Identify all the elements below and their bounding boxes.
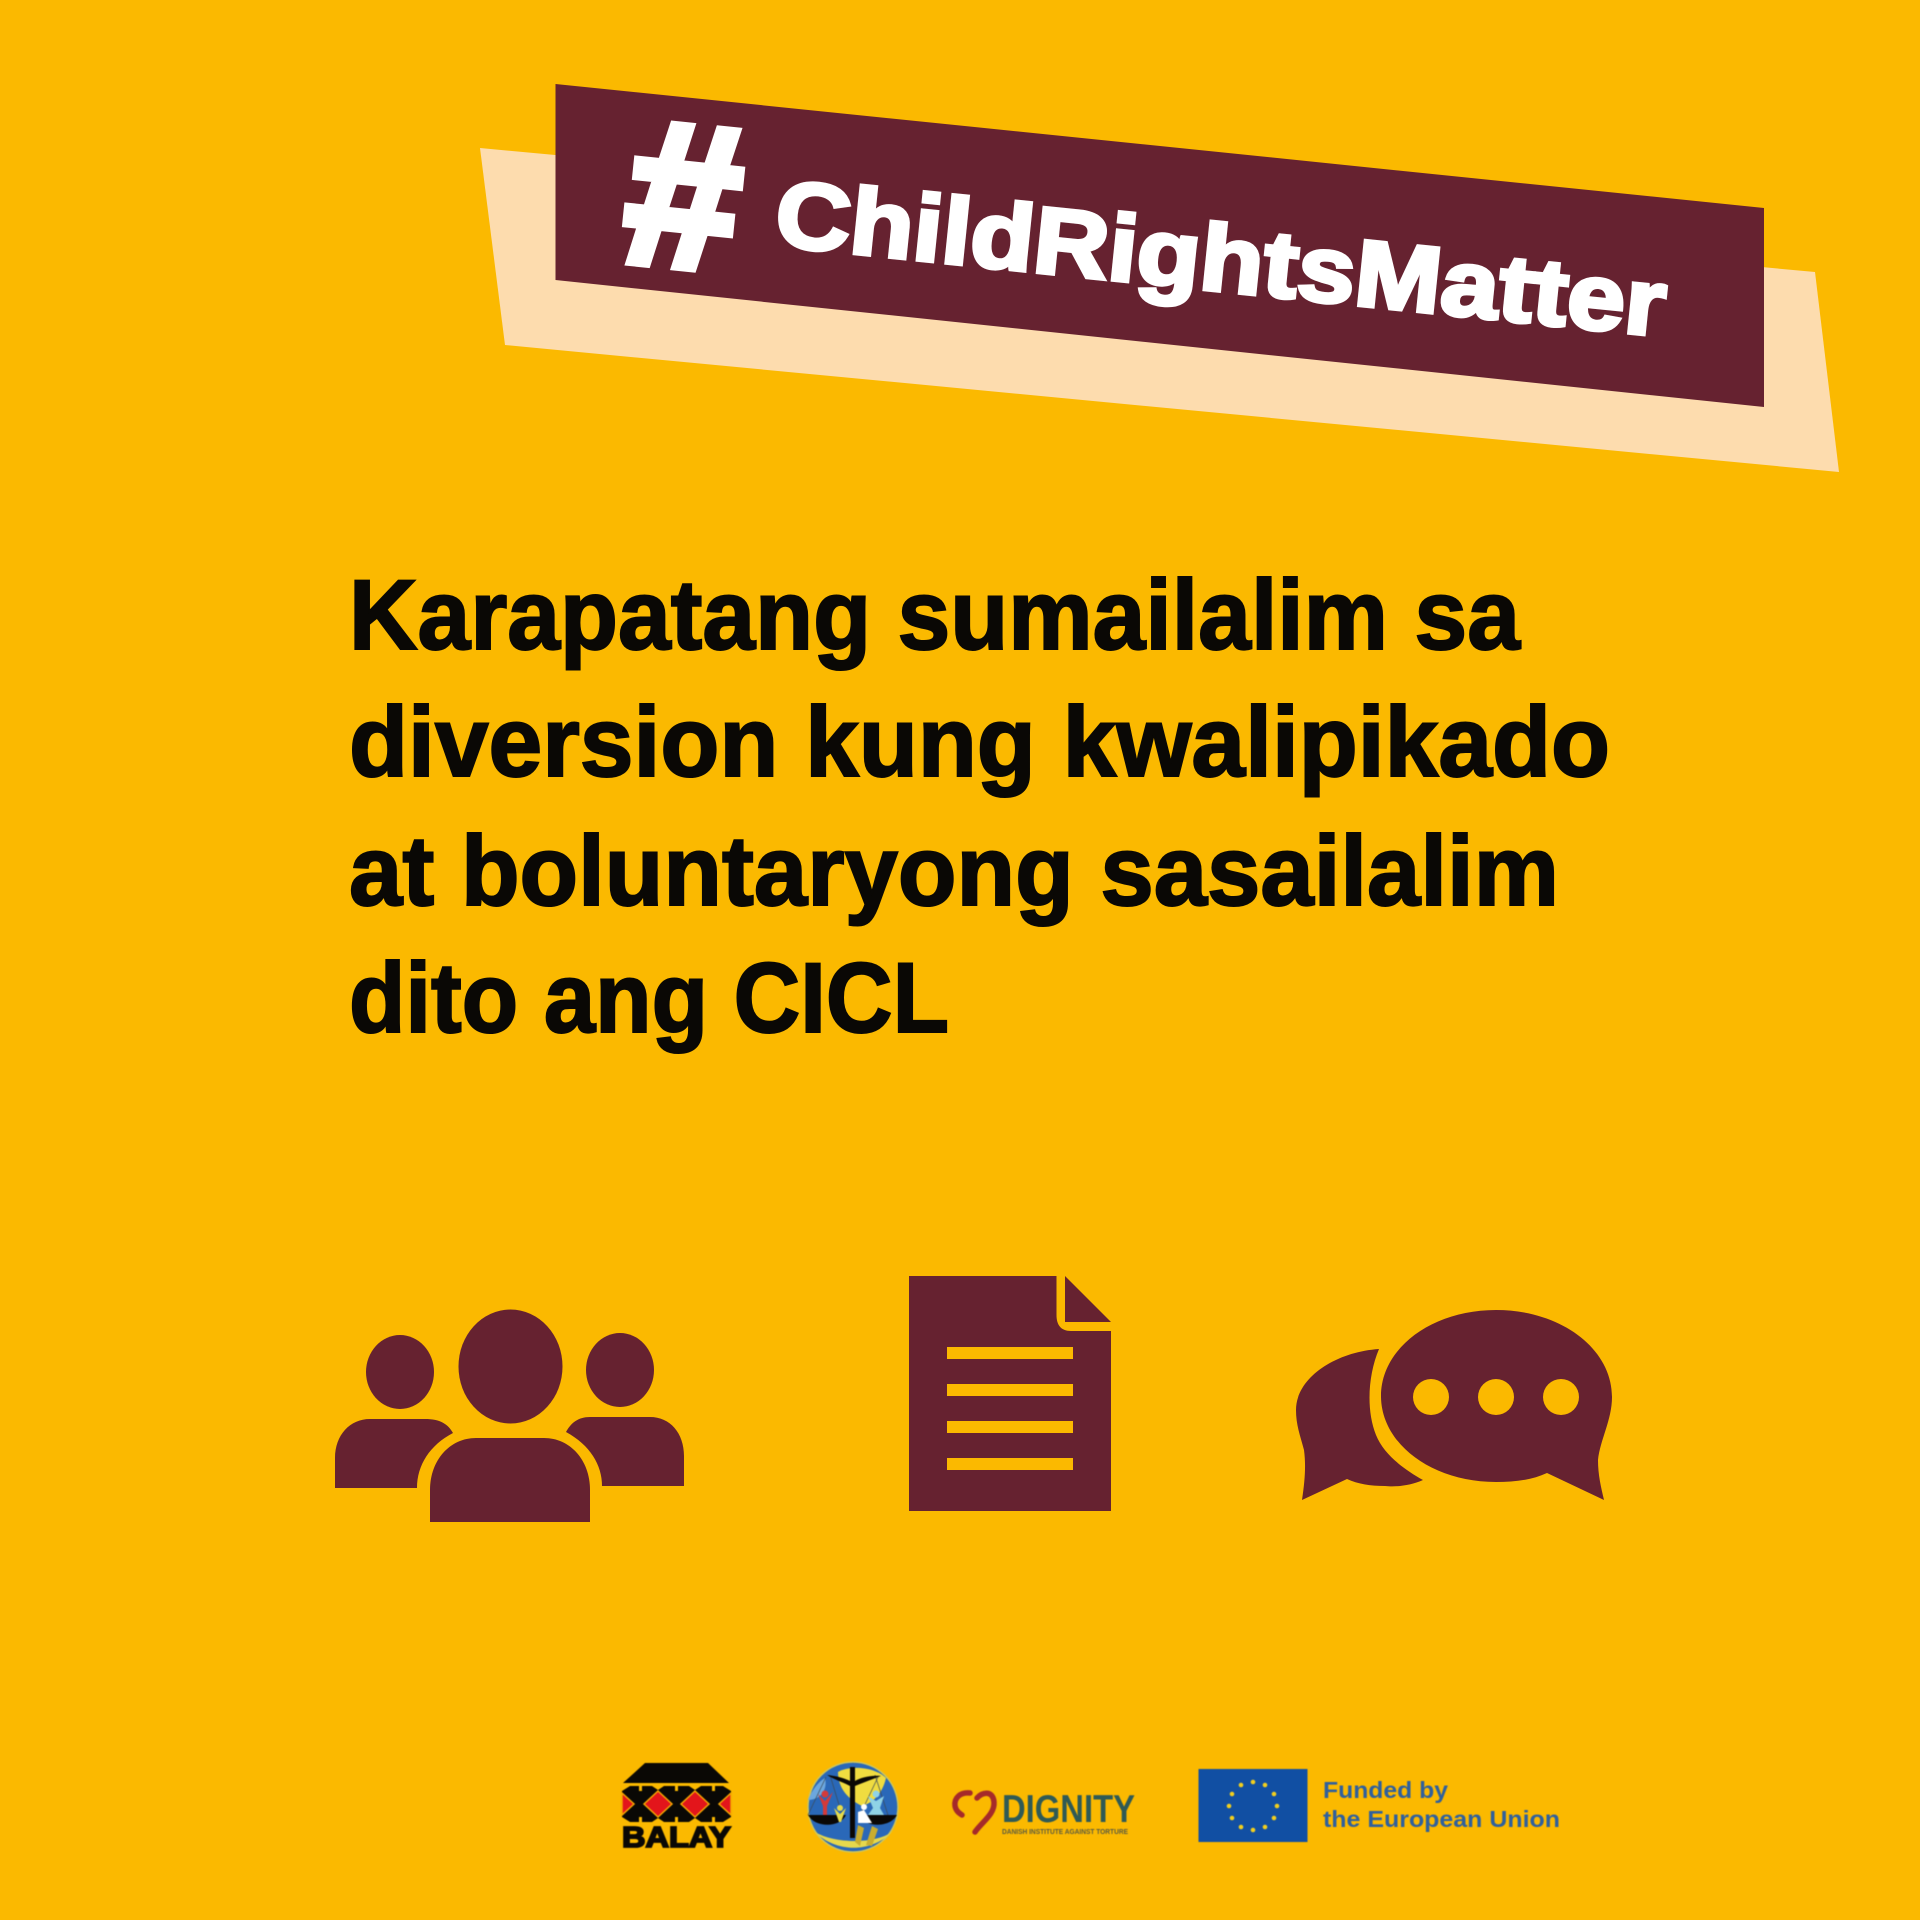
logo: BALAY [622, 1763, 731, 1854]
logo: globe and scales [808, 1762, 898, 1852]
main heading: at boluntaryong sasailalim [349, 815, 1559, 926]
logo: EU flag and funding statement [1198, 1769, 1560, 1842]
banner maroon panel [556, 84, 1764, 407]
logo: DIGNITY: DANISH INSTITUTE AGAINST TORTURE [1002, 1829, 1128, 1836]
icon: group of people [335, 1310, 684, 1522]
logo: EU flag and funding statement: the European Union [1323, 1806, 1560, 1832]
logo: DIGNITY: DIGNITY [1002, 1788, 1135, 1831]
banner cream backing [480, 148, 1839, 472]
logo: BALAY: BALAY [622, 1822, 731, 1854]
main heading: dito ang CICL [349, 942, 949, 1053]
main heading: diversion kung kwalipikado [349, 686, 1610, 797]
hashtag text: ChildRightsMatter [771, 160, 1671, 356]
logo: EU flag and funding statement: Funded by [1323, 1777, 1448, 1803]
main heading [349, 559, 1610, 1053]
icon: chat bubbles [1296, 1310, 1612, 1500]
hashtag banner [480, 77, 1839, 472]
icon: document [909, 1276, 1111, 1511]
hash symbol: # [616, 77, 752, 315]
heart mark [955, 1793, 994, 1832]
main heading: Karapatang sumailalim sa [349, 559, 1521, 670]
logo: DIGNITY [955, 1788, 1135, 1836]
